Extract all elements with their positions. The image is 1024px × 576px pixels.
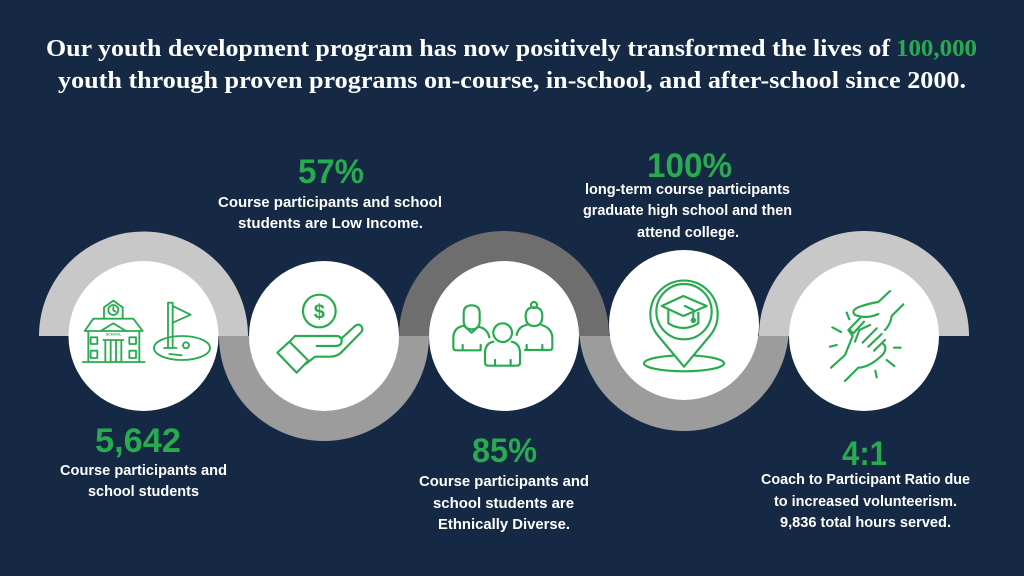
panel: low income <box>249 261 399 411</box>
stat: 85% <box>419 432 589 533</box>
stat: 5,642: 5,642 <box>95 422 181 460</box>
title: Our youth development program has now positively transformed the lives of <box>46 36 891 62</box>
stat: 57%: Course participants and school <box>218 195 442 211</box>
title <box>46 36 977 94</box>
stat: 100%: long-term course participants <box>585 182 790 198</box>
panel: ethnically diverse <box>429 261 579 411</box>
stat: 100%: 100% <box>647 147 732 185</box>
title: youth through proven programs on-course, in-school, and after-school since 2000. <box>58 68 966 94</box>
icon: school and golf flag: SCHOOL <box>106 332 122 336</box>
stat: 5,642: Course participants and <box>60 463 227 479</box>
stat: 85%: school students are <box>433 496 574 512</box>
stat: 57%: 57% <box>298 153 364 191</box>
panel: coach ratio <box>789 261 939 411</box>
stat: 100% <box>583 147 792 241</box>
icon: school and golf flag <box>83 301 210 362</box>
panel: college <box>609 250 759 400</box>
stat: 5,642 <box>60 422 227 500</box>
stat: 85%: 85% <box>472 432 537 470</box>
icon: hand holding coin <box>277 295 362 373</box>
title: 100,000 <box>896 36 977 62</box>
stat: 4:1: 4:1 <box>842 435 887 473</box>
stat: 4:1: Coach to Participant Ratio due <box>761 472 970 488</box>
stat: 4:1 <box>761 435 970 531</box>
icon: helping hands <box>830 291 903 381</box>
stat: 100%: attend college. <box>637 225 739 241</box>
stat: 4:1: 9,836 total hours served. <box>780 515 951 531</box>
stat: 57% <box>218 153 442 232</box>
wave ribbon <box>39 231 969 441</box>
panel: participants <box>68 261 218 411</box>
icon: graduation cap pin <box>644 281 724 371</box>
stat: 57%: students are Low Income. <box>238 216 423 232</box>
icon: three people <box>453 302 552 366</box>
icon: hand holding coin: $ <box>314 301 325 323</box>
stat: 100%: graduate high school and then <box>583 203 792 219</box>
stat: 5,642: school students <box>88 484 199 500</box>
stat: 85%: Ethnically Diverse. <box>438 517 570 533</box>
stat: 4:1: to increased volunteerism. <box>774 494 957 510</box>
stat: 85%: Course participants and <box>419 474 589 490</box>
